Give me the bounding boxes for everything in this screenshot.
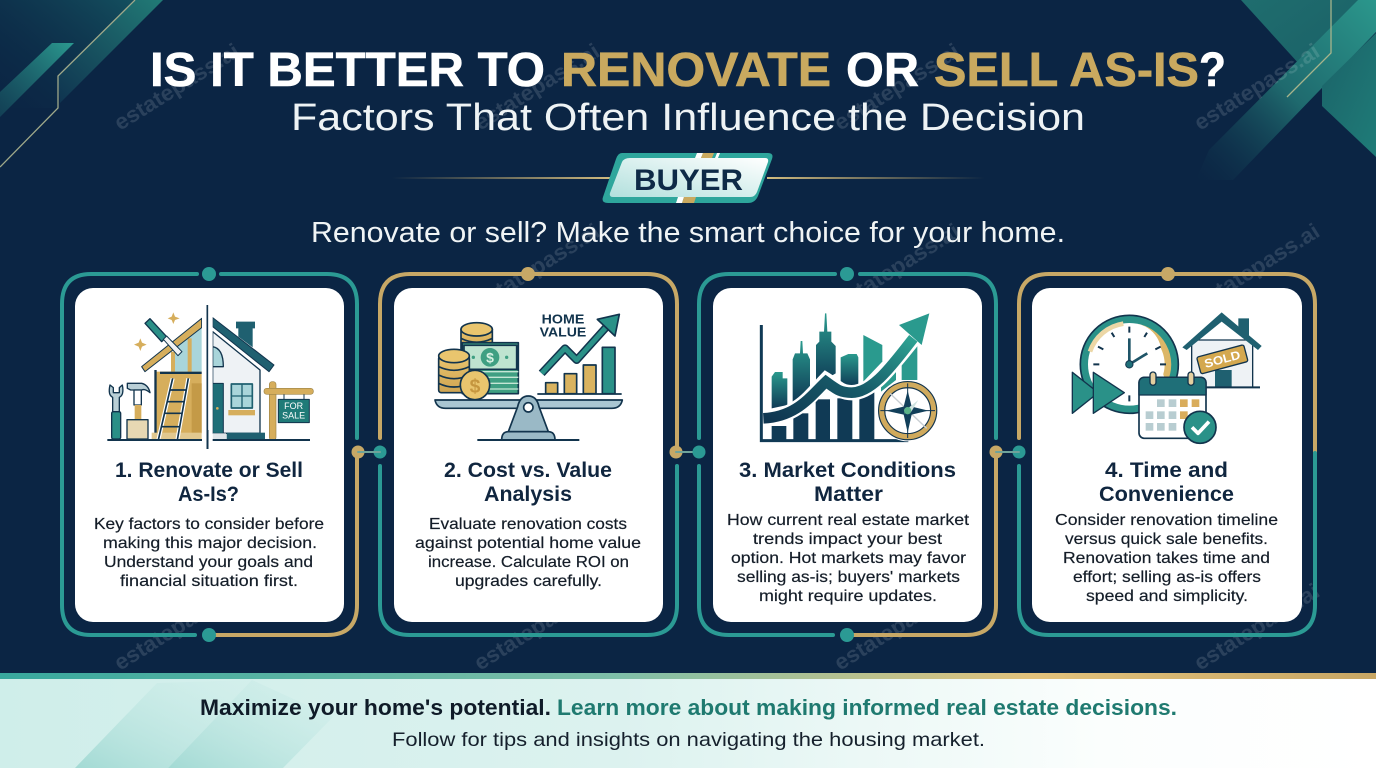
frame 2 — [358, 267, 699, 635]
buyer tag with rules: BUYER — [634, 164, 743, 197]
card 4 text: Renovation takes time and — [1063, 550, 1270, 567]
frame 1 — [62, 267, 364, 642]
card 2 text: Evaluate renovation costs — [429, 516, 627, 533]
icon: clock calendar and sold house: SOLD — [1203, 348, 1242, 371]
card 2 text — [415, 516, 641, 590]
title: RENOVATE — [561, 44, 831, 97]
footer call to action — [200, 695, 1177, 720]
title — [150, 44, 1226, 97]
footer secondary line: Follow for tips and insights on navigating the housing market. — [392, 729, 985, 751]
panel: card 1 — [75, 288, 344, 622]
watermarks: estatepass.ai — [469, 218, 604, 315]
watermarks: estatepass.ai — [109, 578, 244, 675]
divider foot — [206, 430, 208, 449]
card 3 text: selling as-is; buyers' markets — [737, 569, 960, 586]
top-left corner decoration — [0, 0, 163, 167]
icon: renovate or for sale house: SALE — [282, 411, 305, 421]
icon: money versus home value scale — [435, 311, 622, 440]
card 3 text — [727, 512, 970, 605]
card 3 text: option. Hot markets may favor — [731, 550, 967, 567]
card 4 text: Consider renovation timeline — [1055, 512, 1278, 529]
panel: card 2 — [394, 288, 663, 622]
watermarks: estatepass.ai — [829, 38, 964, 135]
card 2 heading: 2. Cost vs. Value — [444, 458, 612, 482]
card 2 heading: Analysis — [484, 482, 572, 506]
panel: card 4 — [1032, 288, 1302, 622]
card 2 text: upgrades carefully. — [455, 573, 602, 590]
watermarks: estatepass.ai — [469, 578, 604, 675]
icon: money versus home value scale: VALUE — [540, 325, 587, 340]
card 3 heading: 3. Market Conditions — [739, 458, 956, 482]
icon: money versus home value scale: HOME — [542, 311, 585, 326]
card 4 heading: 4. Time and — [1105, 458, 1228, 482]
watermarks: estatepass.ai — [829, 218, 964, 315]
watermarks: estatepass.ai — [1189, 218, 1324, 315]
card 3 heading — [739, 458, 956, 506]
tagline: Renovate or sell? Make the smart choice for your home. — [311, 217, 1065, 249]
watermarks: estatepass.ai — [1189, 578, 1324, 675]
card 3 text: How current real estate market — [727, 512, 970, 529]
card 3 text: trends impact your best — [753, 531, 943, 548]
panel: card 3 — [713, 288, 982, 622]
card 4 text: versus quick sale benefits. — [1065, 531, 1268, 548]
card 1 heading: 1. Renovate or Sell — [115, 458, 303, 482]
card 1 heading — [115, 458, 303, 506]
subtitle: Factors That Often Influence the Decision — [291, 97, 1085, 139]
card 1 text: Key factors to consider before — [94, 516, 324, 533]
card 3 heading: Matter — [814, 482, 884, 506]
icon: clock calendar and sold house — [1072, 312, 1262, 443]
card 2 text: against potential home value — [415, 535, 641, 552]
icon: money versus home value scale: $ — [470, 376, 481, 397]
title: OR — [846, 44, 919, 97]
watermarks — [109, 38, 1324, 675]
card 1 text: financial situation first. — [120, 573, 298, 590]
footer call to action: Maximize your home's potential. — [200, 695, 551, 720]
footer call to action: Learn more about making informed real estate decisions. — [557, 695, 1177, 720]
panel: frame connectors — [62, 267, 1315, 642]
frame 4 — [996, 267, 1315, 635]
card 1 text — [94, 516, 324, 590]
icon: renovate or for sale house: FOR — [284, 401, 304, 411]
title: IS IT BETTER TO — [150, 44, 545, 97]
card 4 text — [1055, 512, 1278, 605]
top-right corner decoration — [1196, 0, 1376, 180]
card 1 heading: As-Is? — [178, 482, 239, 506]
card 4 text: speed and simplicity. — [1086, 588, 1248, 605]
card 2 heading — [444, 458, 612, 506]
card 4 text: effort; selling as-is offers — [1073, 569, 1261, 586]
card 1 text: making this major decision. — [103, 535, 317, 552]
icon: money versus home value scale: $ — [486, 350, 494, 366]
frame 3 — [692, 267, 1002, 642]
watermarks: estatepass.ai — [469, 38, 604, 135]
card 4 heading: Convenience — [1099, 482, 1234, 506]
card 4 heading — [1099, 458, 1234, 506]
footer panel — [0, 673, 1376, 768]
card 3 text: might require updates. — [759, 588, 937, 605]
buyer tag with rules — [392, 153, 985, 203]
watermarks: estatepass.ai — [1189, 38, 1324, 135]
title: SELL AS-IS — [934, 44, 1199, 97]
watermarks: estatepass.ai — [829, 578, 964, 675]
card 1 text: Understand your goals and — [104, 554, 313, 571]
card 2 text: increase. Calculate ROI on — [428, 554, 629, 571]
title: ? — [1199, 44, 1226, 97]
watermarks: estatepass.ai — [109, 38, 244, 135]
icon: renovate or for sale house — [107, 305, 313, 443]
icon: skyline chart with compass — [761, 312, 938, 441]
